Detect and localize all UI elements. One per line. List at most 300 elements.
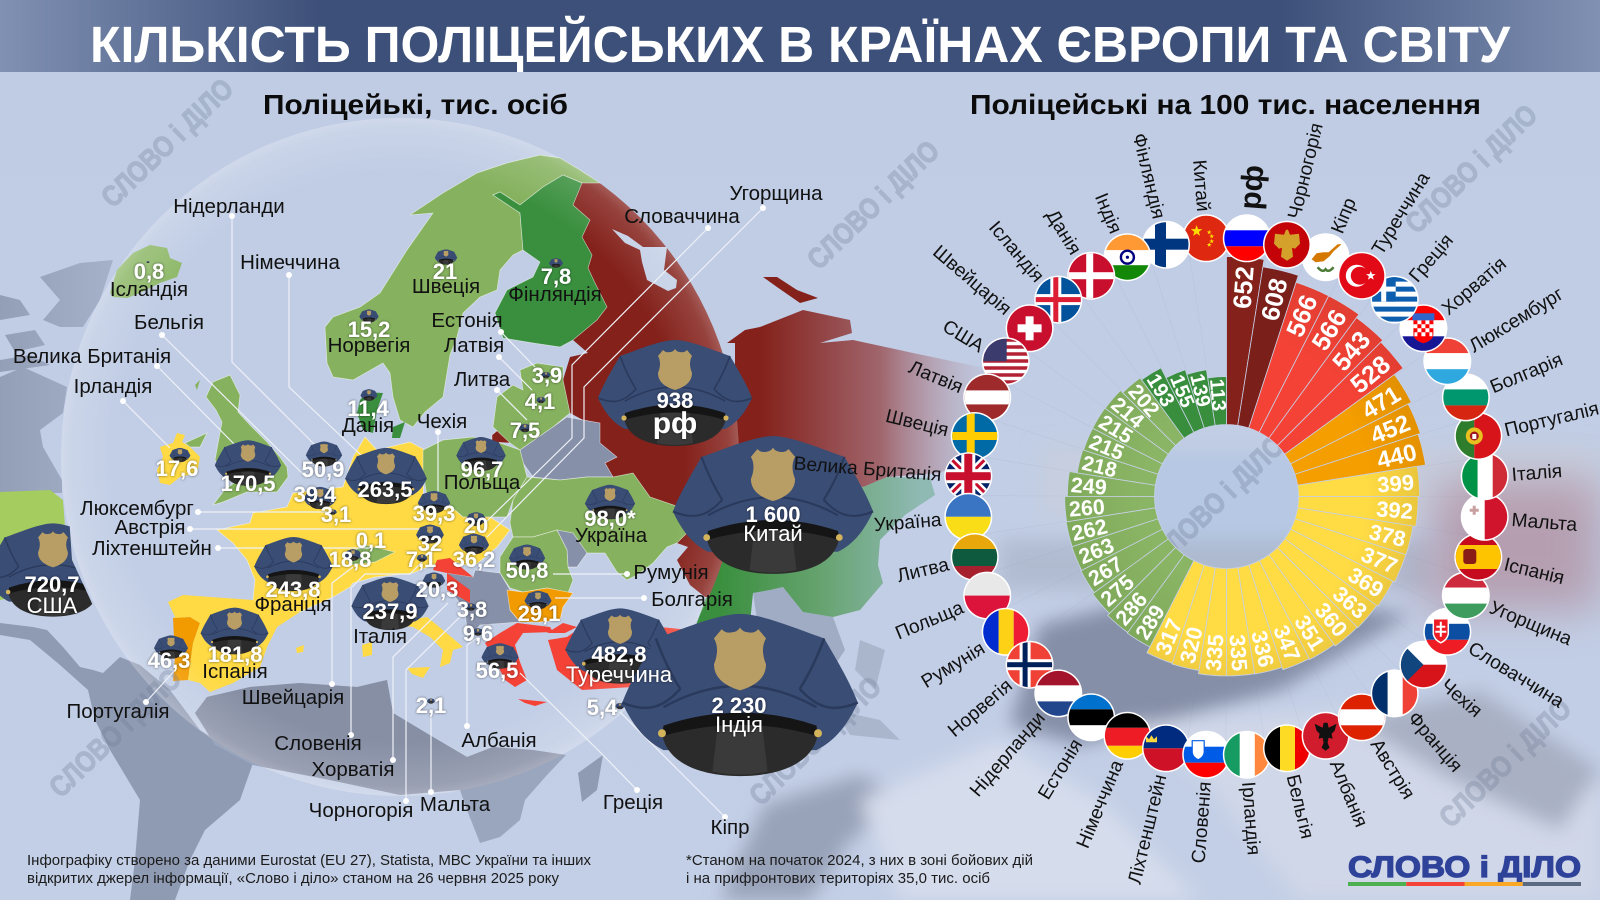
map values: 29,1 [518,601,560,626]
map values: Індія [715,712,763,737]
label: Бельгія [1282,772,1317,841]
hat: Luxembourg [329,509,337,515]
flag: Luxembourg [1423,337,1471,385]
hat: Finland [549,258,563,268]
flag: Turkey [1338,252,1386,300]
bar 608 [1238,267,1299,432]
map values: 720,7 [24,572,80,597]
label: Албанія [461,729,537,752]
map values: Китай [743,521,803,546]
map values: Туреччина [566,662,673,687]
hat: Albania [473,628,483,636]
title band [0,0,1600,73]
bar 113 [1202,375,1234,427]
bar 275 [1091,528,1178,616]
South-East Asia [753,587,845,680]
label: Україна [873,510,943,536]
label: Чехія [417,410,467,433]
map values: 2 230 [711,693,767,718]
bar 113: 113 [1205,378,1230,412]
label: Польща [444,471,521,494]
footnote: Ukraine: *Станом на початок 2024, з них в зоні бойових дій [686,852,1033,869]
label: Португалія [1502,398,1600,441]
hat: Romania [509,545,545,569]
bar 347 [1233,559,1310,672]
hat: Czechia [418,491,450,513]
flag: Switzerland [1006,304,1054,352]
label: Ліхтенштейн [1125,772,1171,886]
label: Чорногорія [1284,121,1328,221]
bar 215 [1091,407,1174,468]
bar 260: 260 [1068,495,1106,522]
White Sea [612,229,677,291]
label: Албанія [1325,757,1371,830]
hat: Lithuania [519,424,531,432]
bar 286: 286 [1111,587,1152,630]
map values: 20,3 [416,577,458,602]
flag: Latvia [963,373,1011,421]
label: Румунія [918,638,989,693]
map values: 7,1 [406,547,436,572]
background photo: blurred police car [720,445,1600,900]
flag: Portugal [1454,412,1502,460]
map values: 17,6 [156,456,198,481]
bar 378 [1292,507,1413,555]
label: Норвегія [944,675,1017,742]
map values: 2,1 [416,693,446,718]
central European yellow block [217,437,510,612]
faint world map [0,260,900,900]
bar 289: 289 [1131,601,1170,644]
title: КІЛЬКІСТЬ ПОЛІЦЕЙСЬКИХ В КРАЇНАХ ЄВРОПИ ТА СВІТУ [90,15,1511,73]
label: Люксембург [80,497,194,520]
flag: Czechia [1399,641,1447,689]
label: Україна [575,524,648,547]
watermark: СЛОВО і ДІЛО [743,671,888,812]
hat: Switzerland [345,549,361,561]
flag: Denmark [1067,252,1115,300]
Cyprus [627,697,638,707]
label: Греція [1405,230,1458,287]
label: Китай [1188,159,1213,212]
bar 317: 317 [1150,615,1187,659]
flag: Cyprus [1302,233,1350,281]
globe [61,118,739,796]
Serbia and neighbours [447,570,520,640]
Great Britain [206,375,288,505]
Baltic states [493,363,570,450]
bar 392 [1298,496,1418,526]
bar 652: 652 [1229,265,1260,310]
bar 528 [1277,342,1405,470]
hat: Austria [416,524,444,544]
flag: Greece [1371,276,1419,324]
label: Хорватія [312,758,394,781]
map values: 3,8 [457,597,487,622]
Denmark [357,392,405,438]
flag: Netherlands [1034,669,1082,717]
Madagascar [578,755,603,802]
USA territory [0,490,80,600]
Belarus [520,417,617,480]
Switzerland [345,545,395,565]
label: Бельгія [134,311,204,334]
bar 363 [1267,538,1377,629]
bar 566: 566 [1307,305,1353,356]
bar 155 [1162,368,1213,435]
hat: USA [0,523,92,617]
label: Литва [895,554,951,587]
footnote: Ukraine: і на прифронтових територіях 35,0 тис. осіб [686,870,990,887]
label: Ісландія [110,278,188,301]
Italy boot [395,610,463,667]
hat: Germany [345,448,427,504]
hat: Ukraine [585,485,635,519]
map: Europe inside the globe [110,155,745,707]
police hats sized by force [0,249,873,776]
spokes [1036,306,1416,686]
bar 215: 215 [1095,411,1137,449]
label: Болгарія [651,588,733,611]
bar 378: 378 [1367,519,1408,552]
bar 335 [1210,567,1256,678]
bar 218: 218 [1080,452,1119,482]
hat: Estonia [541,372,551,378]
label: Словенія [1189,781,1216,864]
label: Ліхтенштейн [92,537,212,560]
flag: Italy [1461,452,1509,500]
map values: 237,9 [362,599,418,624]
flag: Belgium [1263,724,1311,772]
label: Німеччина [1073,757,1128,852]
hat: Spain [201,608,268,654]
hat: Malta [427,698,435,704]
flag: Germany [1103,712,1151,760]
label: Фінляндія [1128,131,1169,221]
label: Швеція [412,275,480,298]
bar 320: 320 [1175,624,1208,666]
label: Австрія [1366,736,1418,803]
flag: Malta [1461,493,1509,541]
bar 440 [1294,434,1428,505]
flag: Spain [1454,533,1502,581]
bar 317 [1146,556,1207,664]
label: Велика Британія [13,345,171,368]
map values: 98,0* [584,506,636,531]
flag: France [1371,669,1419,717]
watermark: СЛОВО і ДІЛО [1399,99,1544,240]
label: Латвія [444,334,504,357]
Norway and Sweden [325,155,600,427]
hat: UK [215,440,281,486]
map values: 0,8 [134,259,164,284]
flag: China [1184,214,1226,262]
map values: 39,3 [413,501,455,526]
flag: Austria [1338,693,1386,741]
label: Болгарія [1487,349,1566,398]
map values: 36,2 [453,547,495,572]
bar 320 [1172,562,1218,671]
flag: Bulgaria [1442,373,1490,421]
bar 452: 452 [1367,410,1414,450]
flag: India [1103,233,1151,281]
label: Франція [1403,708,1466,777]
bar 452 [1290,404,1423,493]
radial chart country labels [793,121,1600,886]
flag: Slovakia [1423,608,1471,656]
bar 652 [1226,256,1264,425]
Ukraine [510,473,697,580]
map values: 0,1 [356,528,386,553]
flag: Albania [1302,712,1350,760]
flag: Sweden [951,412,999,460]
Bulgaria [507,588,573,622]
label: Угорщина [1486,598,1575,650]
bar 566: 566 [1281,291,1324,341]
Poland [423,437,527,517]
bar 360 [1256,546,1358,648]
map values: 50,8 [506,558,548,583]
footnote: sources: Інфографіку створено за даними Eurostat (EU 27), Statista, МВС України та інших [27,852,591,869]
bar 214: 214 [1107,393,1148,434]
China and India [695,477,935,628]
flag: Poland [963,572,1011,620]
map values: 5,4 [587,695,618,720]
watermark: СЛОВО і ДІЛО [1433,693,1578,834]
map values: 46,3 [148,648,190,673]
watermark: СЛОВО і ДІЛО [801,135,946,276]
Spain [168,595,300,692]
bar 543 [1268,318,1384,459]
map values: 32 [418,531,442,556]
map values: 39,4 [294,482,337,507]
bar 286 [1106,539,1187,634]
label: Кіпр [1328,195,1361,237]
bar 215: 215 [1086,431,1127,465]
hat: Hungary [459,534,489,554]
flag: UK [944,452,992,500]
bar 275: 275 [1096,570,1139,611]
hat: Latvia [536,397,546,403]
bar 347: 347 [1268,621,1305,665]
bar 336 [1222,564,1283,676]
heading: right: Поліцейські на 100 тис. населення [970,89,1481,120]
leader lines [120,205,766,820]
bar 193 [1139,366,1203,441]
Croatia and Slovenia [433,558,473,603]
label: Словаччина [1464,638,1568,713]
hat: Sweden [435,249,457,265]
label: Мальта [1511,510,1578,536]
label: рф [1234,164,1270,211]
hat: Portugal [154,635,188,659]
Kaliningrad [492,430,512,443]
bar 262 [1064,494,1160,550]
Turkey [547,623,690,690]
map values: 56,5 [476,658,518,683]
flag: Ukraine [944,493,992,541]
hat: Slovenia [417,554,427,562]
bar 566 [1248,282,1330,440]
label: Чорногорія [309,799,413,822]
bar 360: 360 [1310,598,1353,642]
label: Німеччина [240,251,340,274]
Portugal [173,617,200,681]
map values [24,259,803,737]
bar 139: 139 [1185,372,1214,409]
hat: Norway [359,309,379,323]
flag: Norway [1006,641,1054,689]
flag: Finland [1142,221,1190,269]
label: Данія [342,414,394,437]
flag: Russia [1223,214,1271,262]
bar 566 [1259,296,1360,449]
bar 249: 249 [1070,473,1108,500]
label: Нідерланди [173,195,285,218]
label: Франція [254,593,332,616]
Greece [485,623,553,706]
map values: 181,8 [207,642,263,667]
Africa inside the globe [195,680,562,795]
flag: USA [982,337,1030,385]
bar 215 [1082,428,1166,478]
label: Словаччина [624,205,740,228]
bar 471 [1284,374,1414,481]
map values: 243,8 [265,577,321,602]
flag: Hungary [1442,572,1490,620]
label: Естонія [1034,736,1087,803]
map values: 11,4 [347,396,390,421]
Canada and Greenland [0,260,113,493]
label: Чехія [1436,675,1486,722]
bar 377 [1285,518,1406,583]
Africa [195,680,566,843]
label: Ірландія [1237,781,1264,856]
bar 289 [1126,548,1197,648]
label: Іспанія [1502,554,1566,589]
label: Мальта [420,793,491,816]
map values: 4,1 [525,389,555,414]
bar 262: 262 [1069,514,1110,546]
watermark: СЛОВО і ДІЛО [43,663,188,804]
map values: 482,8 [591,642,647,667]
map values: 20 [464,513,488,538]
bar 471: 471 [1357,381,1406,425]
label: Швейцарія [928,242,1015,320]
hat: China [673,436,873,574]
bar 440: 440 [1374,439,1420,475]
bar 335: 335 [1201,633,1229,672]
label: Індія [1090,190,1125,237]
map values: 7,8 [541,264,571,289]
map values: 170,5 [220,471,276,496]
label: Латвія [906,357,966,398]
label: Іспанія [202,660,268,683]
label: Італія [1511,461,1563,486]
bar 202 [1120,376,1192,449]
bar 399: 399 [1376,470,1415,498]
Romania [500,530,573,593]
map values: 96,7 [461,457,503,482]
bar 249 [1067,472,1155,500]
footnote: sources: відкритих джерел інформації, «Слово і діло» станом на 26 червня 2025 року [27,870,559,887]
map values: 50,9 [302,457,344,482]
bar 260 [1063,483,1157,525]
map values: 21 [433,259,457,284]
hat: Turkey [565,608,675,684]
hat: Ireland [170,448,190,462]
map values: рф [653,407,697,440]
label: Польща [893,597,967,644]
hat: Russia [598,340,752,446]
bar 369 [1277,528,1393,607]
bar 336: 336 [1246,628,1279,670]
label: Нідерланди [966,708,1050,801]
bar 528: 528 [1346,350,1396,399]
bar 214 [1103,389,1183,458]
bar 193: 193 [1142,370,1179,411]
bar 263 [1070,506,1165,573]
map values: 3,1 [321,502,351,527]
Finland [493,175,607,347]
label: Кіпр [710,816,750,839]
label: Швеція [883,406,951,441]
label: Хорватія [1438,253,1511,320]
bar 218 [1077,450,1160,489]
Iceland [110,245,182,298]
flag: Estonia [1067,693,1115,741]
bar 377: 377 [1358,542,1401,579]
hat: Greece [482,643,518,669]
footnote: sources [27,852,591,887]
hat: India [622,614,858,776]
label: Люксембург [1466,284,1567,357]
Ireland [157,433,200,485]
label: Туреччина [1368,169,1435,259]
label: Португалія [66,700,170,723]
hat: Croatia [423,572,445,588]
watermark: СЛОВО і ДІЛО [95,73,240,214]
label: Ісландія [984,217,1048,287]
flag: Iceland [1034,276,1082,324]
hat: Denmark [361,389,377,401]
flags ring [944,214,1509,779]
Sicily, Sardinia, Balearic islands [296,642,430,678]
bar 363: 363 [1328,581,1372,624]
footnote: Ukraine [686,852,1033,887]
radial chart: police per 100k [1036,256,1428,686]
bar 335 [1198,568,1229,676]
label: Фінляндія [508,283,602,306]
label: Швейцарія [242,686,344,709]
bar 139 [1182,368,1224,430]
bar 335: 335 [1224,633,1252,672]
Russia east [727,310,1010,560]
watermark: СЛОВО і ДІЛО [1146,430,1291,571]
Moldova [557,530,587,567]
flag: Romania [982,608,1030,656]
label: Ірландія [74,375,152,398]
label: Угорщина [730,182,823,205]
Scotland islands [195,330,257,390]
map values: 1 600 [745,502,801,527]
flag: Croatia [1399,304,1447,352]
map values: 9,6 [463,621,493,646]
hat: Slovakia [466,512,486,526]
logo: СЛОВО і ДІЛО [1348,851,1581,884]
label: Норвегія [328,334,410,357]
hat: Montenegro [466,603,476,611]
